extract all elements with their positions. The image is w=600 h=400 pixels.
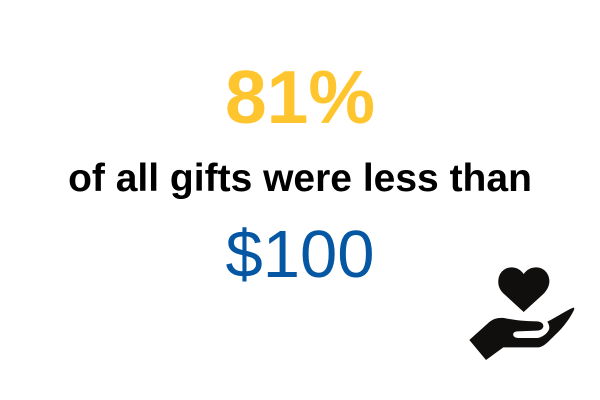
icon: heart <box>498 267 549 312</box>
icon: hand holding heart <box>469 267 574 360</box>
icon: hand <box>469 308 574 360</box>
amount stat: $100: $100 <box>225 217 375 292</box>
text block: of all gifts were less than: of all gifts were less than <box>68 157 532 200</box>
headline stat: 81%: 81% <box>225 55 375 139</box>
